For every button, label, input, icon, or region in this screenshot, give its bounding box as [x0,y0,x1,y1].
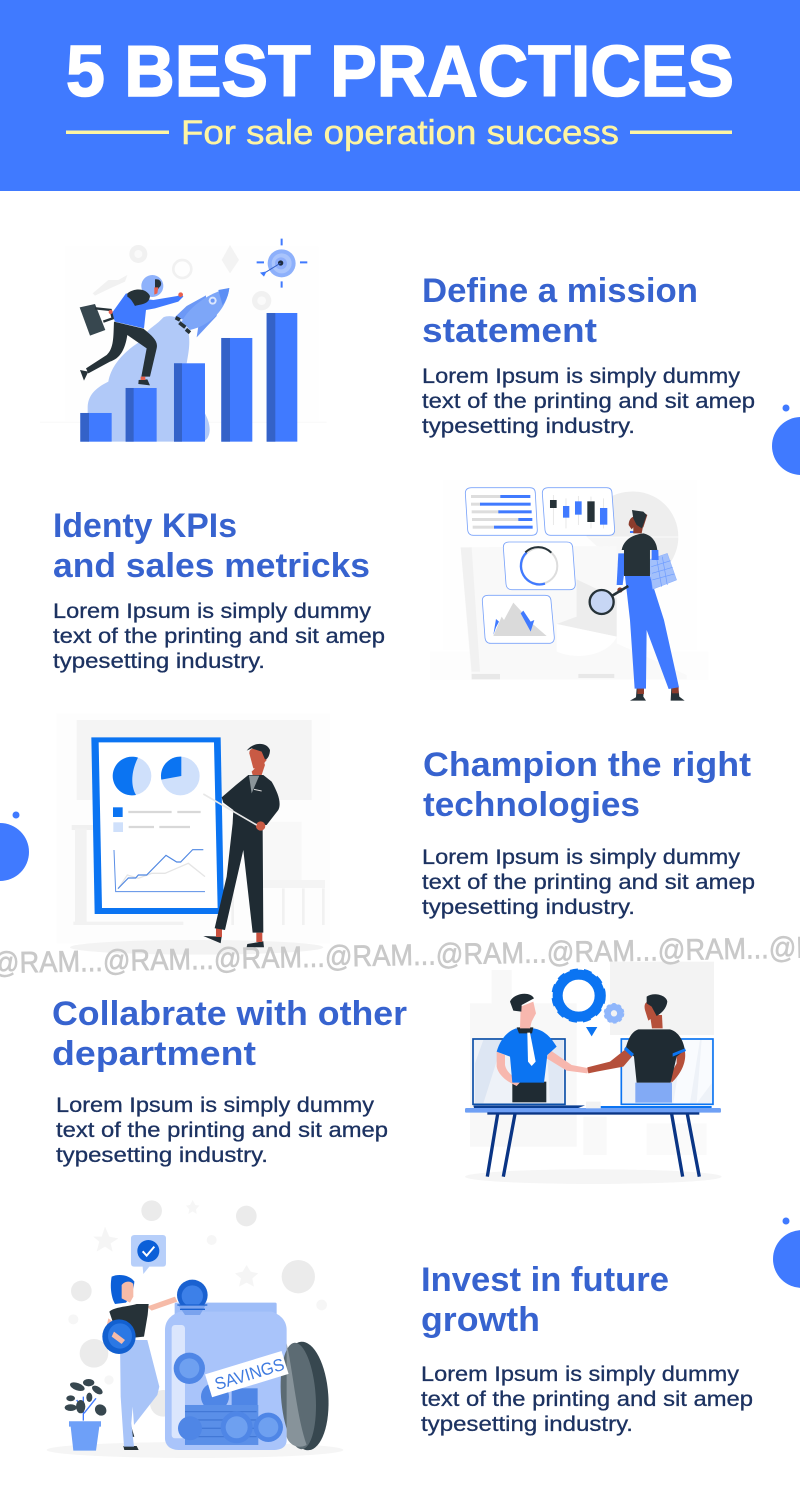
body text 4 [56,1093,388,1167]
desk [465,1102,721,1177]
woman running [80,275,183,385]
jar lid [277,1340,332,1452]
illustration: man with magnifier and dashboard cards [430,480,708,701]
body text 5 [421,1362,753,1436]
body text 5: Lorem Ipsum is simply dummy [421,1362,739,1386]
subtitle rule right [630,130,732,134]
heading 3 [423,746,751,824]
heading 1: Define a mission [422,272,698,310]
body text 2 [53,599,385,673]
woman [102,1275,177,1450]
heading 4: Collabrate with other [52,995,407,1033]
bar chart bars [80,313,297,442]
body text 3: Lorem Ipsum is simply dummy [422,845,740,869]
heading 3: Champion the right [423,746,751,784]
cloud [88,316,210,442]
heading 5 [421,1261,669,1339]
card: bars [465,488,537,535]
heading 3: technologies [423,786,640,824]
savings label: SAVINGS [212,1354,287,1394]
laptop left [473,1039,585,1108]
pie charts [113,757,200,795]
heading 2: and sales metricks [53,547,370,585]
background coins and stars [68,1200,327,1417]
decorative circle left [0,812,29,881]
heading 4: department [52,1035,256,1073]
card: mountains [482,595,554,643]
heading 2: Identy KPIs [53,507,237,545]
body text 2: typesetting industry. [53,649,265,673]
decorative circle right top [772,404,800,475]
illustration: handshake over laptops [465,962,722,1184]
heading 5: Invest in future [421,1261,669,1299]
body text 4: Lorem Ipsum is simply dummy [56,1093,374,1117]
laptop right [601,1039,713,1108]
coins in jar [174,1353,283,1445]
body text 2: text of the printing and sit amep [53,624,385,648]
body text 5: text of the printing and sit amep [421,1387,753,1411]
heading 4 [52,995,407,1073]
decorative circle right bottom [773,1218,800,1288]
rocket [175,288,229,337]
body text 2: Lorem Ipsum is simply dummy [53,599,371,623]
subtitle rule left [66,130,169,134]
heading 5: growth [421,1301,540,1339]
legend [113,807,201,832]
man standing [617,510,685,701]
man left [497,994,589,1102]
plant [65,1379,109,1451]
body text 3: text of the printing and sit amep [422,870,755,894]
card: donut [503,542,575,590]
presenter man [203,744,280,947]
illustration: woman running up bar chart with rocket [40,239,327,442]
body text 5: typesetting industry. [421,1412,633,1436]
body text 3 [422,845,755,919]
card: candlesticks [542,488,615,535]
body text 1 [422,364,755,438]
coin held [102,1319,136,1354]
man right [587,994,686,1103]
savings jar [165,1280,287,1450]
presentation board [91,737,224,914]
target with arrow [257,239,307,288]
grey pie background [587,492,678,580]
illustration: man presenting charts on board [57,713,330,955]
body text 1: Lorem Ipsum is simply dummy [422,364,740,388]
body text 1: typesetting industry. [422,414,635,438]
gears [553,970,623,1036]
body text 4: text of the printing and sit amep [56,1118,388,1142]
body text 1: text of the printing and sit amep [422,389,755,413]
heading 1 [422,272,698,350]
body text 4: typesetting industry. [56,1143,268,1167]
illustration: woman with savings jar [47,1200,343,1458]
body text 3: typesetting industry. [422,895,635,919]
heading 2 [53,507,370,585]
line chart [114,850,205,892]
subtitle: For sale operation success [181,114,619,152]
calendar [648,553,677,589]
check bubble [131,1235,166,1274]
grey screen [461,546,687,679]
magnifying glass [590,586,628,614]
title: 5 BEST PRACTICES [66,32,734,112]
header band [0,0,800,191]
heading 1: statement [422,312,597,350]
